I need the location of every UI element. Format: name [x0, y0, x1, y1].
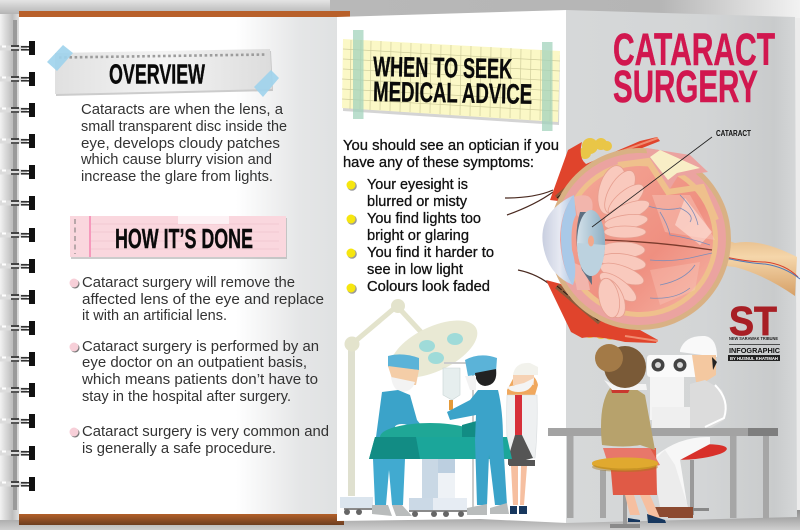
optic nerve: [712, 218, 800, 296]
panel: right grey page: [566, 10, 797, 523]
stools and table legs: [567, 436, 769, 524]
cataract pointer line: [592, 137, 712, 227]
text: symptoms intro: You should see an optician if you: [343, 138, 559, 154]
text: overview paragraph: increase the glare from lights.: [81, 169, 273, 185]
list: symptoms: You find lights too: [367, 211, 481, 227]
text: overview paragraph: [80, 102, 287, 185]
lens with cataract: [577, 210, 605, 276]
table base: [422, 459, 455, 498]
panel: left notebook page: [0, 17, 338, 514]
text: overview paragraph: which cause blurry vision and: [80, 152, 272, 168]
surgeon left: [372, 354, 425, 516]
text: symptoms intro: have any of these symptoms:: [343, 155, 534, 171]
retina highlights and veins: [645, 195, 715, 305]
eyelashes: [505, 190, 553, 287]
ciliary petals: [593, 162, 652, 322]
illustration: eye anatomy: [505, 137, 800, 343]
notebook cover edges: [19, 11, 350, 525]
tabletop: [548, 428, 778, 436]
list: how it's done points: eye doctor on an outpatient basis,: [82, 355, 307, 371]
list: symptoms: [346, 177, 494, 295]
list: how it's done points: which means patients don’t have to: [81, 372, 318, 388]
list: symptoms: Colours look faded: [367, 279, 490, 295]
nurse: [507, 363, 538, 514]
text: symptoms intro: [343, 138, 559, 171]
spiral binding: [0, 20, 35, 510]
heading: how it's done: HOW IT’S DONE: [115, 223, 253, 254]
heading: when to seek medical advice: WHEN TO SEEK: [373, 51, 512, 84]
list: how it's done points: Cataract surgery is very common and: [82, 424, 329, 440]
heading: overview: [47, 45, 279, 97]
logo: ST infographic: BY HUSNUL KHATIMAH: [730, 356, 778, 361]
logo: ST infographic: ST: [729, 298, 777, 344]
list: symptoms: Your eyesight is: [367, 177, 468, 193]
central fold line: [605, 240, 712, 250]
list: symptoms: bright or glaring: [367, 228, 469, 244]
iris: [576, 212, 592, 285]
label: cataract: CATARACT: [716, 129, 751, 138]
list: how it's done points: it with an artificial lens.: [82, 308, 227, 324]
list: symptoms: You find it harder to: [367, 245, 494, 261]
list: how it's done points: is generally a safe procedure.: [82, 441, 276, 457]
patient: [592, 344, 666, 523]
heading: overview: OVERVIEW: [109, 58, 205, 90]
text: overview paragraph: Cataracts are when the lens, a: [81, 102, 284, 118]
heading: when to seek medical advice: [342, 30, 560, 131]
surgical lamp: [344, 299, 486, 496]
text: overview paragraph: small transparent disc inside the: [81, 119, 287, 135]
list: how it's done points: affected lens of the eye and replace: [82, 292, 324, 308]
heading: when to seek medical advice: MEDICAL ADVICE: [373, 76, 532, 110]
base plates: [340, 497, 467, 517]
cornea: [542, 195, 576, 285]
logo: ST infographic: NEW SARAWAK TRIBUNE: [729, 336, 778, 341]
illustration: eye examination: [548, 336, 778, 528]
heading: how it's done: [70, 212, 287, 259]
cutaway notch: [618, 148, 716, 220]
surgeon right: [447, 355, 509, 515]
eye muscles: [546, 137, 660, 343]
list: how it's done points: Cataract surgery is performed by an: [82, 339, 319, 355]
logo: ST infographic: INFOGRAPHIC: [729, 346, 781, 355]
list: symptoms: see in low light: [367, 262, 463, 278]
text: overview paragraph: eye, develops cloudy patches: [81, 136, 280, 152]
patient mound and drape: [369, 420, 512, 459]
list: how it's done points: [70, 275, 329, 457]
panel: middle white page: [337, 10, 567, 523]
machine: [647, 355, 698, 429]
stool pads: [610, 524, 640, 528]
doctor: [652, 336, 728, 518]
title: cataract surgery: [613, 24, 775, 112]
ciliary body: [572, 195, 593, 290]
fat deposits: [576, 138, 615, 340]
list: symptoms: blurred or misty: [367, 194, 468, 210]
list: how it's done points: Cataract surgery will remove the: [82, 275, 295, 291]
IV stand: [443, 362, 474, 507]
list: how it's done points: stay in the hospital after surgery.: [82, 389, 291, 405]
illustration: operating room: [340, 299, 538, 517]
eyeball layers: [549, 148, 731, 330]
